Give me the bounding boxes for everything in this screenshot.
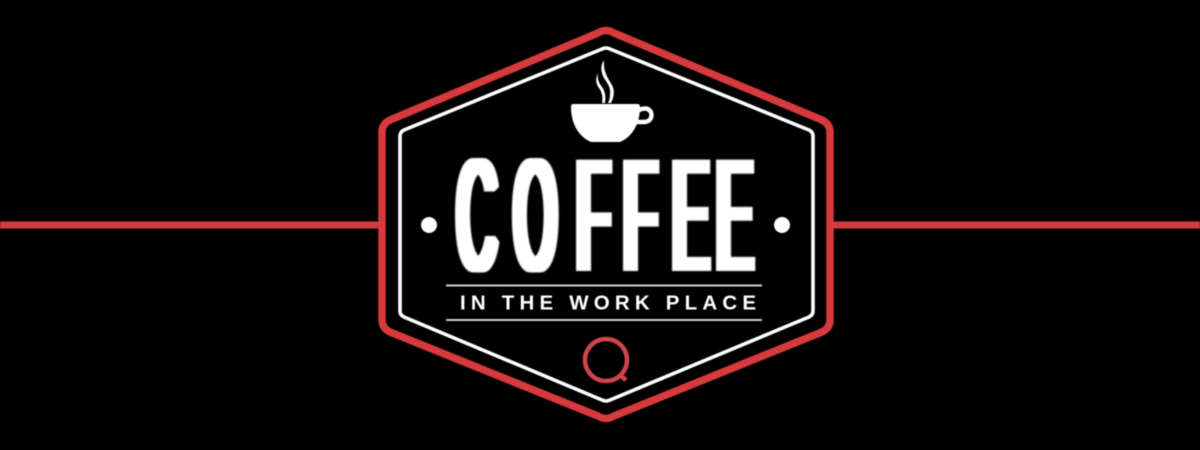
steam small wisp	[596, 73, 605, 103]
white hexagon outline	[400, 48, 813, 401]
steam	[601, 60, 614, 103]
title: COFFEE: COFFEE	[457, 127, 753, 305]
red hexagon outline	[382, 30, 830, 418]
icon: Q logo	[585, 339, 627, 381]
left red line	[0, 222, 380, 228]
subtitle: IN THE WORK PLACE	[460, 292, 756, 314]
rule below subtitle	[446, 319, 762, 321]
Q ring	[585, 339, 627, 381]
icon: coffee cup with steam	[571, 60, 652, 142]
right dot	[774, 217, 790, 233]
cup body	[571, 104, 640, 142]
rule above subtitle	[446, 284, 762, 286]
cup handle	[634, 108, 652, 122]
right red line	[832, 222, 1200, 228]
Q tail	[620, 375, 626, 380]
left dot	[421, 217, 437, 233]
